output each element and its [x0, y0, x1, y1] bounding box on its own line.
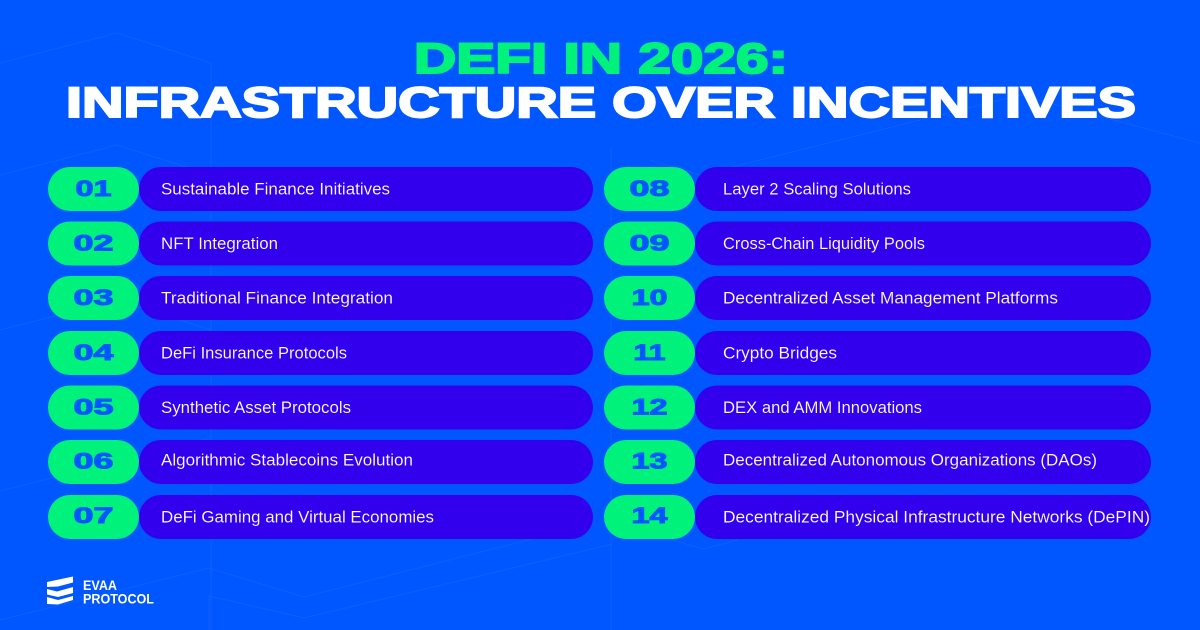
item 03: Traditional Finance Integration	[161, 290, 393, 308]
item 12: DEX and AMM Innovations	[723, 399, 922, 417]
item 01: Sustainable Finance Initiatives	[161, 180, 390, 198]
item 07: DeFi Gaming and Virtual Economies	[161, 508, 434, 526]
item 08	[604, 167, 1151, 211]
item 04: DeFi Insurance Protocols	[161, 344, 347, 362]
item 04	[48, 331, 593, 375]
item 02: 02	[74, 230, 114, 256]
list: left column	[48, 167, 593, 539]
item 06	[48, 440, 593, 484]
item 14: Decentralized Physical Infrastructure Networks (DePIN)	[723, 508, 1150, 526]
item 11: 11	[634, 340, 666, 365]
item 02: NFT Integration	[161, 235, 278, 253]
item 05: 05	[74, 394, 114, 420]
item 01: 01	[76, 176, 112, 201]
item 09: 09	[630, 230, 670, 256]
item 09	[604, 222, 1151, 266]
logo: EVAA Protocol: PROTOCOL	[83, 592, 154, 606]
item 09: Cross-Chain Liquidity Pools	[723, 235, 925, 253]
item 04: 04	[74, 340, 115, 365]
item 10	[604, 276, 1151, 320]
logo: EVAA Protocol	[47, 576, 154, 606]
item 10: 10	[632, 285, 668, 310]
item 14: 14	[632, 503, 669, 528]
item 06: Algorithmic Stablecoins Evolution	[161, 452, 413, 470]
item 13: Decentralized Autonomous Organizations (DAOs)	[723, 452, 1097, 470]
list: right column	[604, 167, 1151, 539]
item 14	[604, 495, 1151, 539]
item 13	[604, 440, 1151, 484]
item 03	[48, 276, 593, 320]
item 03: 03	[74, 285, 114, 310]
item 08: Layer 2 Scaling Solutions	[723, 180, 911, 198]
item 05	[48, 386, 593, 430]
item 13: 13	[632, 448, 668, 474]
item 05: Synthetic Asset Protocols	[161, 399, 351, 417]
item 07	[48, 495, 593, 539]
wordmark: EVAA	[83, 578, 117, 593]
title line 1: DEFI IN 2026:	[414, 35, 788, 83]
item 06: 06	[74, 448, 114, 474]
title	[66, 35, 1136, 127]
item 12	[604, 386, 1151, 430]
item 11	[604, 331, 1151, 375]
title line 2: INFRASTRUCTURE OVER INCENTIVES	[66, 79, 1136, 127]
item 01	[48, 167, 593, 211]
item 07: 07	[74, 503, 114, 528]
item 12: 12	[632, 394, 668, 420]
item 02	[48, 222, 593, 266]
icon: stacked slabs	[47, 576, 73, 604]
item 11: Crypto Bridges	[723, 344, 837, 362]
item 10: Decentralized Asset Management Platforms	[723, 290, 1058, 308]
item 08: 08	[630, 176, 670, 201]
